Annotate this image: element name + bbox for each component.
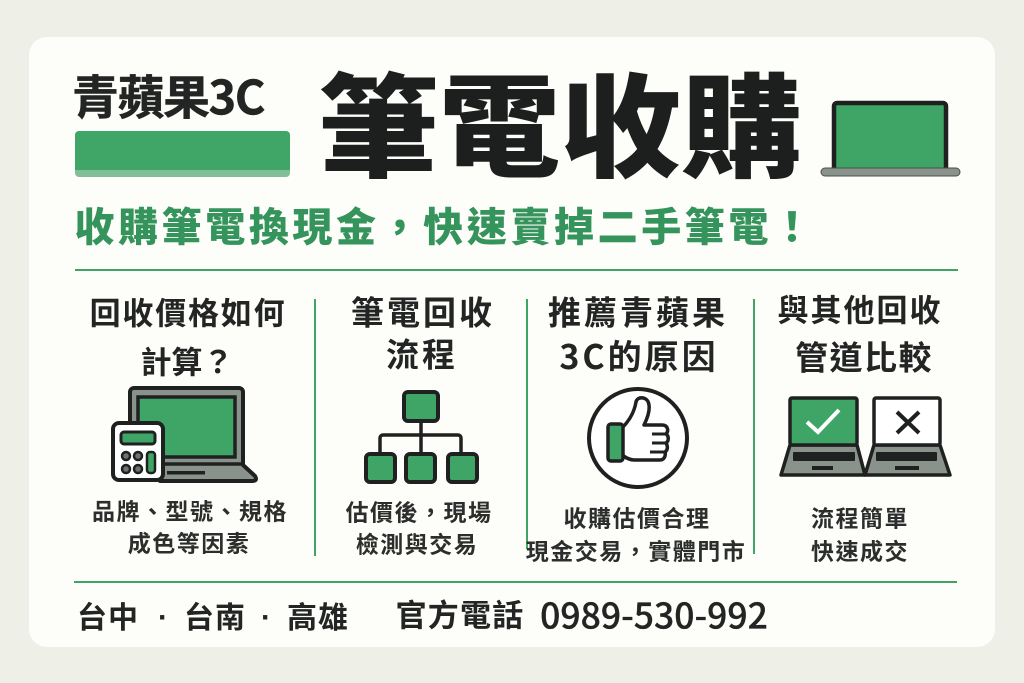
icon: flow chart [364, 390, 479, 484]
locations: 高雄 [287, 593, 349, 637]
column 2 description: 估價後，現場 [346, 494, 492, 528]
bottom divider [74, 581, 957, 583]
column 2 heading: 筆電回收 [351, 286, 495, 334]
column 3 heading: 推薦青蘋果 [548, 286, 728, 334]
column 1 description line 2: 成色等因素 [128, 524, 250, 558]
locations [77, 593, 349, 637]
column 4 heading line 2: 管道比較 [795, 332, 933, 380]
locations: · [158, 601, 168, 634]
column 4 description line 2: 快速成交 [811, 532, 909, 566]
column 3 heading line 2: 3C的原因 [559, 330, 719, 379]
column 1 heading line 2: 計算？ [140, 338, 234, 382]
phone label: 官方電話 [396, 590, 524, 636]
icon: thumbs up [587, 387, 689, 489]
locations: · [261, 601, 271, 634]
column 4 heading: 與其他回收 [778, 286, 942, 330]
column divider 3 [753, 299, 755, 554]
phone number: 0989-530-992 [540, 588, 768, 639]
green brand bar [75, 131, 290, 177]
column 4 description: 流程簡單 [811, 500, 909, 534]
icon: laptop with calculator [111, 386, 258, 483]
laptop good [781, 398, 865, 475]
top divider [75, 269, 958, 271]
main title: 筆電收購 [318, 38, 802, 200]
locations: 台南 [184, 593, 246, 637]
icon: laptop header [820, 100, 960, 176]
column 2 heading line 2: 流程 [386, 328, 458, 376]
subtitle: 收購筆電換現金，快速賣掉二手筆電！ [74, 195, 816, 253]
column 1 heading: 回收價格如何 [90, 288, 286, 334]
column 3 description: 收購估價合理 [564, 500, 710, 534]
brand name: 青蘋果3C [72, 60, 264, 128]
laptop bad [865, 398, 950, 475]
icon: two laptops compare [779, 396, 952, 477]
column 2 description line 2: 檢測與交易 [356, 526, 478, 560]
column divider 1 [314, 299, 316, 556]
locations: 台中 [77, 593, 139, 637]
column divider 2 [526, 299, 528, 549]
column 3 description line 2: 現金交易，實體門市 [526, 532, 746, 566]
column 1 description: 品牌、型號、規格 [92, 492, 288, 526]
